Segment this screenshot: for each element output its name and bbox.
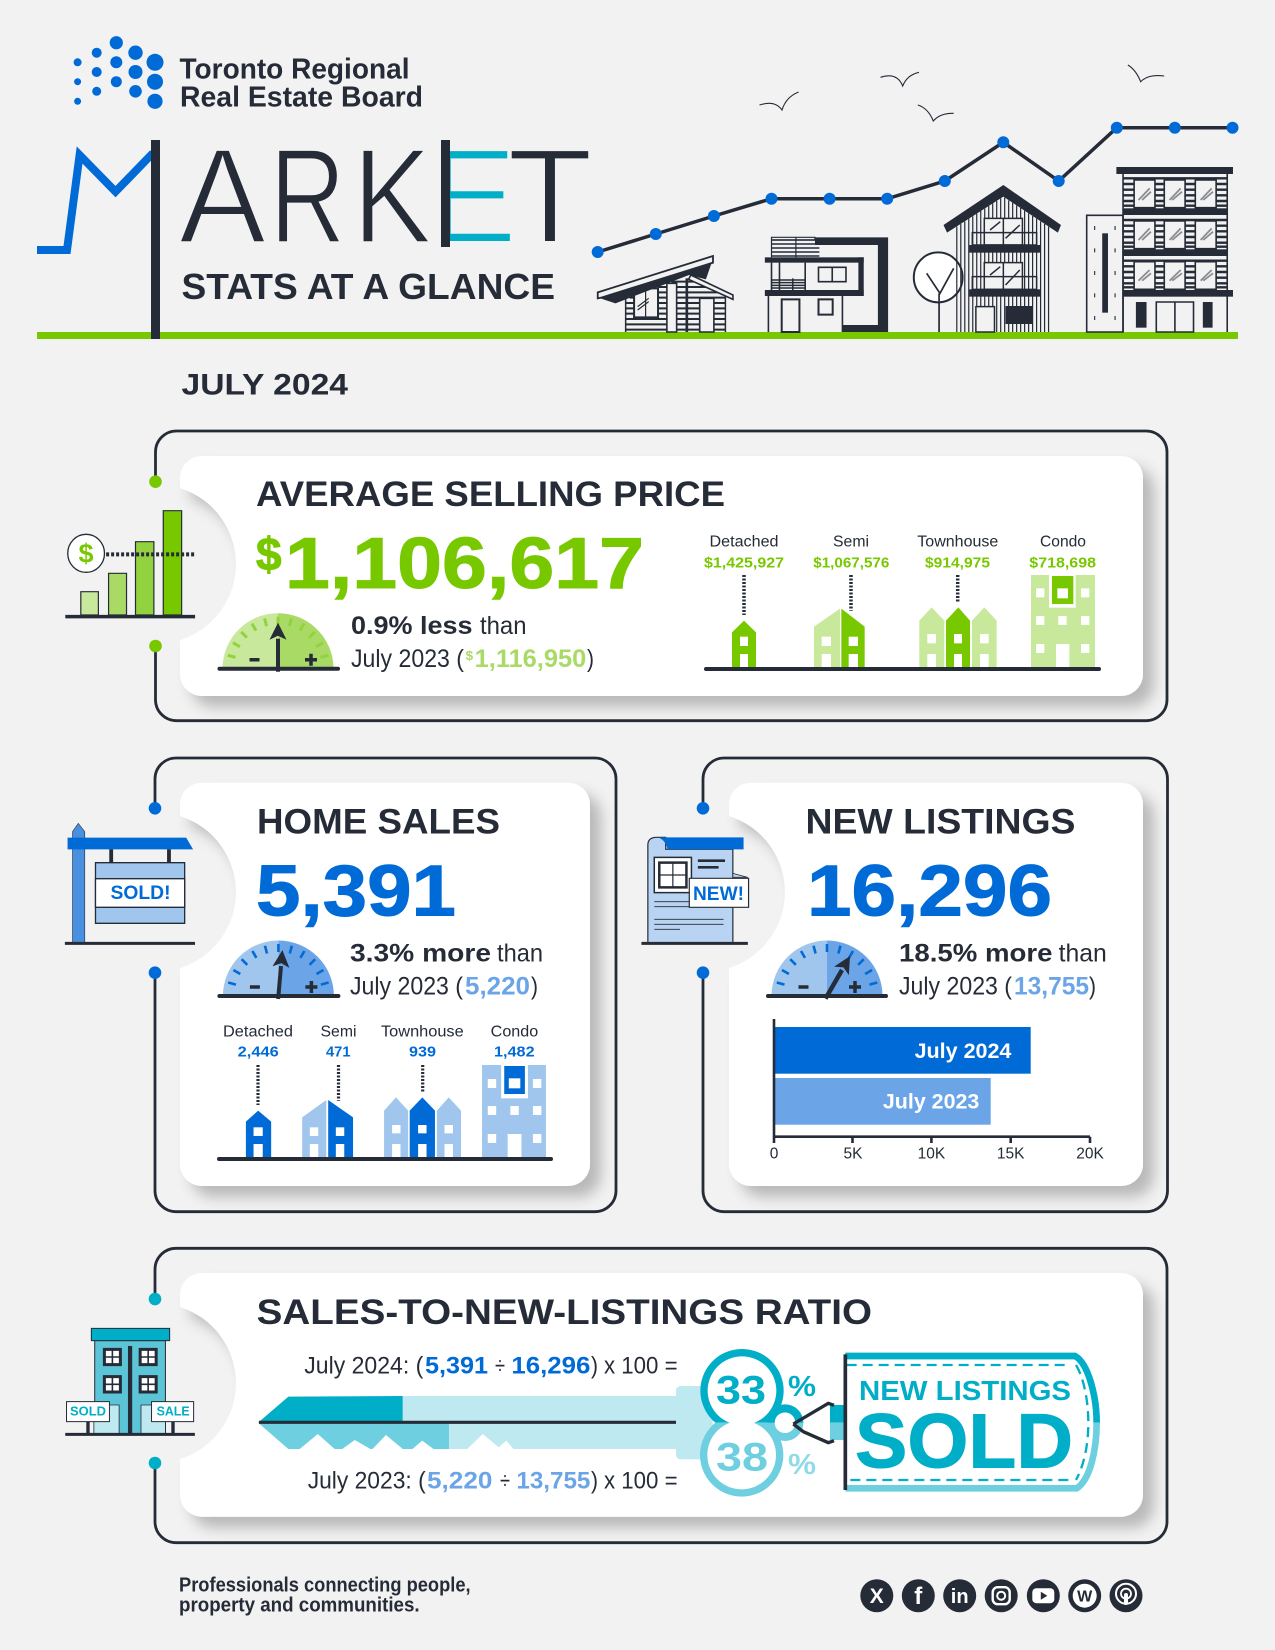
formula: July 2023: x 100 = [604, 1467, 678, 1494]
T: T [507, 120, 593, 272]
bar chart: listings: 20K [1076, 1146, 1104, 1163]
formula: July 2024: ) [591, 1352, 598, 1379]
social icons [860, 1579, 1142, 1612]
line chart over skyline [592, 122, 1238, 258]
panel: home sales [65, 758, 616, 1212]
chart: price by home type: $718,698 [1029, 554, 1096, 571]
tag text: NEW LISTINGS [859, 1375, 1071, 1406]
ratio 33% [716, 1368, 816, 1412]
gauge [768, 940, 886, 1003]
chart: price by home type: Condo [1040, 534, 1086, 551]
footer tagline [179, 1575, 471, 1617]
change text: 0.9% less [351, 612, 472, 640]
change text: July 2023 ( [350, 972, 464, 1000]
gauge [220, 613, 338, 672]
big value: 1,106,617 [285, 524, 644, 604]
frame dots [149, 475, 162, 652]
blue M line [37, 153, 153, 250]
tree [914, 252, 963, 332]
bar chart: listings: 0 [770, 1146, 779, 1163]
chart: sales by home type: Condo [491, 1024, 538, 1041]
formula: July 2024 [304, 1352, 678, 1379]
icon: Instagram [985, 1579, 1018, 1612]
logo wordmark: Real Estate Board [180, 82, 423, 114]
formula: July 2024: x 100 = [604, 1352, 678, 1379]
bar chart: listings: 10K [918, 1146, 946, 1163]
ARK letters [179, 120, 432, 272]
chart: price by home type: $1,067,576 [813, 554, 889, 571]
frame [155, 758, 616, 1212]
heading: AVERAGE SELLING PRICE [256, 475, 725, 514]
M post [151, 140, 160, 339]
icon: WordPress: W [1077, 1588, 1093, 1606]
heading: SALES-TO-NEW-LISTINGS RATIO [257, 1293, 872, 1332]
building 4 [1087, 167, 1233, 332]
icon: X [860, 1579, 893, 1612]
formula: July 2024: July 2024: ( [304, 1352, 423, 1379]
date: JULY 2024 [182, 368, 348, 401]
change text [351, 612, 594, 673]
change text: 1,116,950 [475, 645, 586, 673]
change text: $ [466, 648, 474, 663]
chart: price by home type: $914,975 [925, 554, 990, 571]
frame [703, 758, 1168, 1212]
icon: WordPress [1068, 1579, 1101, 1612]
gauge [219, 940, 338, 1000]
formula: July 2023 [308, 1467, 678, 1494]
bar chart: listings [770, 1019, 1104, 1163]
change text: 13,755 [1014, 972, 1089, 1000]
formula: July 2023: ) [591, 1467, 598, 1494]
card [180, 1273, 1143, 1517]
logo dots [74, 36, 164, 109]
footer tagline: Professionals connecting people, [179, 1575, 471, 1597]
big value: $ [256, 528, 282, 580]
chart: sales by home type: 471 [326, 1044, 350, 1061]
bar chart: listings: July 2023 [883, 1091, 979, 1114]
chart: sales by home type: 939 [409, 1044, 436, 1061]
heading: NEW LISTINGS [806, 802, 1076, 841]
icon: new listing document [641, 837, 749, 943]
change text: July 2023 ( [899, 972, 1013, 1000]
ARK letters: R [270, 120, 346, 272]
ratio 38%: 38 [716, 1436, 768, 1480]
chart: sales by home type: Detached [223, 1024, 293, 1041]
icon: LinkedIn [943, 1579, 976, 1612]
icon: LinkedIn: in [951, 1586, 969, 1608]
frame [155, 1248, 1167, 1543]
house 3 [944, 185, 1061, 332]
icon: podcast [1110, 1579, 1142, 1612]
logo: TRREB [74, 36, 423, 114]
tag text: SOLD [855, 1399, 1073, 1485]
icon: Facebook [902, 1579, 935, 1612]
key graphic [259, 1396, 678, 1449]
icon: rising bars with dollar: $ [78, 538, 94, 568]
card [180, 456, 1143, 696]
birds [760, 65, 1164, 121]
formula: July 2023: 13,755 [516, 1467, 590, 1494]
house 2 [765, 237, 888, 332]
formula: July 2024: 16,296 [511, 1352, 590, 1379]
chart: price by home type: $1,425,927 [704, 554, 784, 571]
subtitle: STATS AT A GLANCE [182, 266, 555, 307]
bar chart: listings: July 2024 [915, 1040, 1012, 1063]
bar chart: listings: 5K [844, 1146, 863, 1163]
change text: ) [531, 972, 538, 1000]
icon: building with sold and sale signs: SOLD [70, 1404, 106, 1419]
change text [899, 940, 1107, 1000]
frame [156, 431, 1167, 721]
frame dots [149, 802, 161, 979]
formula: July 2024: ÷ [495, 1352, 505, 1379]
panel: sales-to-new-listings ratio [65, 1248, 1167, 1543]
change text: July 2023 ( [351, 645, 465, 673]
heading: HOME SALES [257, 802, 500, 841]
ARK letters: K [353, 120, 432, 272]
change text: ) [1089, 972, 1096, 1000]
ratio 33%: % [788, 1371, 816, 1403]
chart: price by home type [704, 534, 1099, 669]
chart: sales by home type: Semi [320, 1024, 356, 1041]
change text: ) [587, 645, 594, 673]
icon: new listing document: NEW! [693, 883, 744, 905]
bar chart: listings: 15K [997, 1146, 1025, 1163]
icon: YouTube [1027, 1579, 1060, 1612]
change text: than [480, 612, 526, 640]
formula: July 2024: 5,391 [425, 1352, 488, 1379]
chart: price by home type: Detached [710, 534, 778, 551]
frame dots [149, 1293, 161, 1469]
change text: 5,220 [465, 972, 530, 1000]
key head, rings and tag [676, 1349, 1097, 1497]
ground line [37, 332, 1238, 339]
chart: sales by home type [219, 1024, 551, 1159]
change text: than [497, 940, 543, 968]
formula: July 2023: July 2023: ( [308, 1467, 426, 1494]
teal E: E [429, 120, 517, 272]
icon: sold sign: SOLD! [110, 882, 170, 904]
chart: price by home type: Semi [833, 534, 869, 551]
chart: price by home type: Townhouse [917, 534, 998, 551]
frame dots [697, 802, 709, 979]
change text [350, 940, 543, 1000]
ratio 33%: 33 [716, 1368, 766, 1412]
chart: sales by home type: Townhouse [381, 1024, 464, 1041]
card [180, 783, 590, 1186]
skyline houses [598, 167, 1233, 332]
icon: X: X [870, 1585, 884, 1608]
change text: 3.3% more [350, 940, 491, 968]
house 1 [598, 256, 733, 332]
icon: sold sign [65, 823, 195, 943]
chart: sales by home type: 2,446 [238, 1044, 279, 1061]
logo wordmark [180, 54, 423, 114]
formula: July 2023: ÷ [500, 1467, 510, 1494]
footer tagline: property and communities. [179, 1595, 420, 1617]
change text: 18.5% more [899, 940, 1053, 968]
panel: new listings [641, 758, 1168, 1212]
ratio 38%: % [788, 1449, 816, 1481]
logo wordmark: Toronto Regional [180, 54, 410, 86]
icon: Facebook: f [914, 1583, 923, 1610]
chart: sales by home type: 1,482 [494, 1044, 535, 1061]
formula: July 2023: 5,220 [427, 1467, 492, 1494]
ratio 38% [716, 1436, 816, 1481]
icon: building with sold and sale signs [65, 1328, 195, 1434]
panel: average selling price [65, 431, 1167, 721]
card [729, 783, 1143, 1186]
icon: rising bars with dollar [65, 511, 195, 617]
icon: building with sold and sale signs: SALE [157, 1404, 190, 1419]
ARK letters: A [179, 120, 266, 272]
big value: 5,391 [256, 852, 456, 932]
title: MARKET [37, 120, 593, 272]
big value: 16,296 [807, 852, 1052, 932]
change text: than [1059, 940, 1107, 968]
